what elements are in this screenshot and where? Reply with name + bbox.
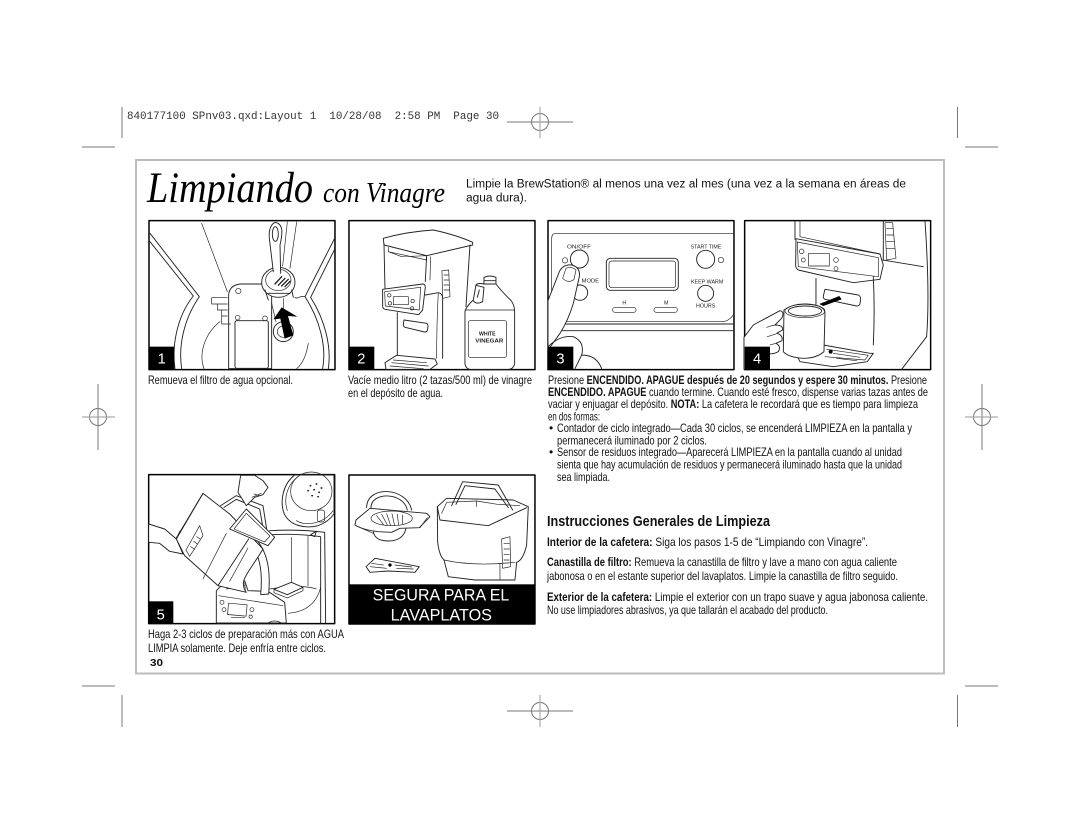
caption 5: LIMPIA solamente. Deje enfría entre ciclos. (148, 641, 326, 655)
water filter (283, 222, 297, 268)
panel 1: remove water filter (149, 221, 335, 370)
panel 3: control panel (548, 221, 734, 370)
hands (149, 524, 183, 554)
open lid (282, 475, 334, 527)
general instructions text: No use limpiadores abrasivos, ya que tallarán el acabado del producto. (547, 603, 828, 617)
steps text: Contador de ciclo integrado—Cada 30 ciclos, se encenderá LIMPIEZA en la pantalla y (557, 421, 912, 435)
mug (783, 304, 825, 358)
panel 3: control panel: M (664, 300, 668, 306)
intro text (466, 178, 906, 204)
water stream (247, 537, 269, 595)
step number 5: 5 (157, 607, 165, 623)
steps text: • (549, 445, 553, 459)
arrow (273, 307, 297, 339)
caption 1: Remueva el filtro de agua opcional. (148, 373, 293, 387)
steps text: Presione ENCENDIDO. APAGUE después de 20 segundos y espere 30 minutos. Presione (548, 373, 927, 387)
filter holder (229, 284, 272, 369)
panel 4: mug under spout (744, 221, 931, 370)
panel 2: pour vinegar (349, 221, 535, 370)
general instructions text (546, 535, 928, 617)
step number 2 (349, 347, 374, 370)
steps text: en dos formas: (548, 410, 600, 424)
coffee maker (383, 230, 473, 369)
intro text: agua dura). (466, 192, 527, 204)
general instructions text: jabonosa o en el estante superior del lavaplatos. Limpie la canastilla de filtro seguido. (546, 569, 898, 583)
filter basket (355, 492, 430, 541)
title suffix: con Vinagre (323, 177, 445, 209)
step number 4 (745, 347, 770, 370)
caption 2: Vacíe medio litro (2 tazas/500 ml) de vinagre (348, 373, 532, 387)
carafe (176, 493, 275, 592)
steps text: ENCENDIDO. APAGUE cuando termine. Cuando esté fresco, dispense varias tazas antes de (548, 385, 928, 399)
panel 3: control panel: HOURS (696, 304, 716, 310)
step number 4: 4 (753, 351, 761, 367)
step number 2: 2 (357, 351, 365, 367)
steps text: Sensor de residuos integrado—Aparecerá LIMPIEZA en la pantalla cuando al unidad (557, 445, 902, 459)
general instructions text: Canastilla de filtro: Remueva la canastilla de filtro y lave a mano con agua caliente (547, 555, 897, 569)
removable tank (437, 482, 528, 580)
drip tray (366, 558, 419, 572)
steps text: sea limpiada. (557, 470, 610, 484)
panel 3: control panel: MODE (582, 279, 599, 285)
printer crop marks (82, 107, 998, 727)
panel 3: control panel: KEEP WARM (691, 279, 723, 285)
hand (744, 311, 783, 369)
steps text: sienta que hay acumulación de residuos y permanecerá iluminado hasta que la unidad (557, 458, 902, 472)
panel 3: control panel: START TIME (691, 245, 722, 251)
panel 6: dishwasher safe parts (349, 475, 535, 625)
vinegar jug: VINEGAR (475, 339, 503, 345)
panel 3: control panel: ON/OFF (567, 245, 592, 251)
caption 2 (348, 373, 532, 400)
step number 5 (148, 601, 173, 624)
dishwasher safe banner: LAVAPLATOS (391, 607, 492, 625)
caption 2: en el depósito de agua. (348, 386, 443, 400)
vinegar jug (465, 276, 515, 369)
panel 5: rinse carafe (148, 472, 335, 624)
step number 3 (548, 347, 573, 370)
panel 3: control panel: H (622, 300, 626, 306)
print slug line: 840177100 SPnv03.qxd:Layout 1 10/28/08 2:58 PM Page 30 (127, 111, 499, 123)
caption 5: Haga 2-3 ciclos de preparación más con AGUA (148, 627, 344, 641)
open coffee maker (216, 472, 334, 623)
step number 1 (149, 347, 174, 370)
general instructions text: Interior de la cafetera: Siga los pasos 1-5 de “Limpiando con Vinagre”. (547, 535, 868, 549)
steps text: permanecerá iluminado por 2 ciclos. (557, 434, 707, 448)
general instructions text: Exterior de la cafetera: Limpie el exterior con un trapo suave y agua jabonosa caliente. (547, 590, 928, 604)
steps text (548, 373, 928, 484)
step number 3: 3 (556, 351, 564, 367)
caption 5 (148, 627, 344, 655)
step number 1: 1 (158, 351, 166, 367)
dishwasher safe banner: SEGURA PARA EL (373, 587, 509, 605)
vinegar jug: WHITE (479, 332, 496, 338)
steps text: vaciar y enjuagar el depósito. NOTA: La cafetera le recordará que es tiempo para limpieza (548, 397, 918, 411)
section heading: Instrucciones Generales de Limpieza (547, 513, 771, 530)
page number: 30 (150, 657, 163, 669)
dishwasher safe banner (349, 584, 535, 625)
page border (136, 160, 944, 674)
title: Limpiando (146, 165, 313, 212)
intro text: Limpie la BrewStation® al menos una vez al mes (una vez a la semana en áreas de (466, 178, 906, 190)
finger (548, 265, 580, 350)
steps text: • (549, 421, 553, 435)
